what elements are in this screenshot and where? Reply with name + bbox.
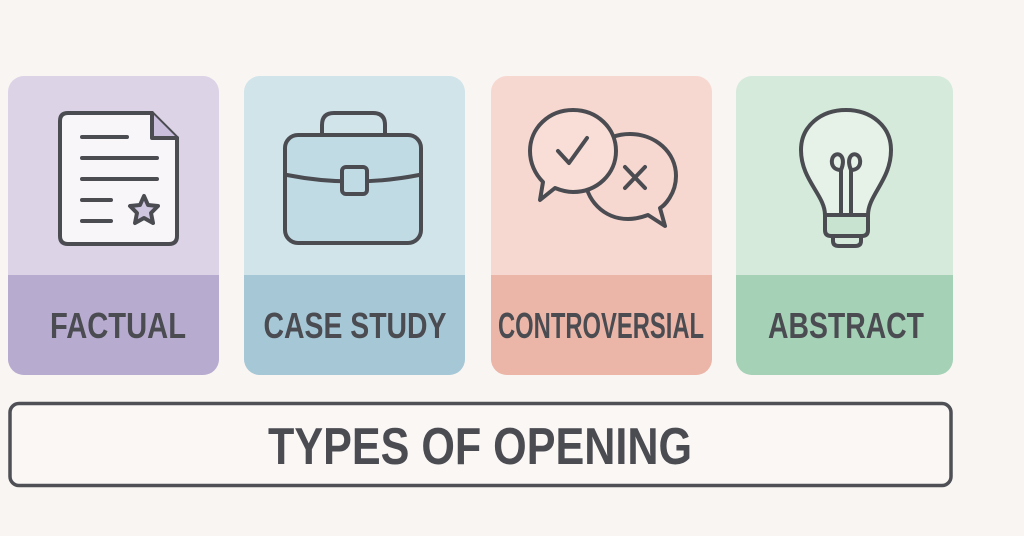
panel: abstract bbox=[736, 76, 953, 375]
title: TYPES OF OPENING bbox=[268, 418, 692, 476]
panel: controversial bbox=[491, 76, 712, 375]
icon: briefcase bbox=[285, 113, 421, 243]
icon: document with star bbox=[60, 113, 177, 244]
panel: case study bbox=[244, 76, 465, 375]
label: factual: FACTUAL bbox=[50, 305, 186, 346]
icon: speech bubbles bbox=[530, 110, 676, 226]
panel: factual bbox=[8, 76, 219, 375]
label: abstract: ABSTRACT bbox=[768, 305, 924, 346]
icon: light bulb bbox=[801, 110, 891, 246]
title box: types of opening bbox=[10, 404, 951, 486]
label: case study: CASE STUDY bbox=[264, 305, 446, 346]
label: controversial: CONTROVERSIAL bbox=[498, 305, 704, 346]
